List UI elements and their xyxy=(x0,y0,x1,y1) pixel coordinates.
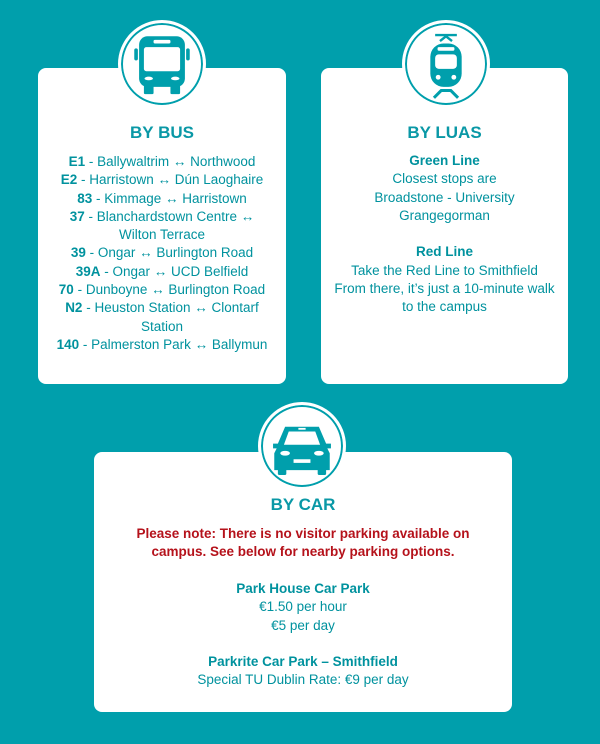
parking note xyxy=(136,526,470,559)
bus routes list: E2 - Harristown ↔ Dún Laoghaire xyxy=(61,172,263,187)
bus routes list: 70 - Dunboyne ↔ Burlington Road xyxy=(59,282,265,297)
luas text: Red Line xyxy=(416,244,473,259)
heading: by car: BY CAR xyxy=(271,495,335,514)
luas text: Grangegorman xyxy=(399,208,490,223)
panel: car xyxy=(94,452,512,712)
luas text: Broadstone - University xyxy=(374,190,515,205)
luas text xyxy=(334,153,555,314)
panel: bus xyxy=(38,68,286,384)
parking note: campus. See below for nearby parking options. xyxy=(151,544,455,559)
icon: luas tram xyxy=(402,20,490,108)
parking note: Please note: There is no visitor parking available on xyxy=(136,526,470,541)
heading: by luas: BY LUAS xyxy=(407,123,482,142)
icon: car xyxy=(258,402,346,490)
bus routes list: 37 - Blanchardstown Centre ↔ xyxy=(70,209,254,224)
bus routes list xyxy=(57,154,267,352)
luas text: Closest stops are xyxy=(392,171,497,186)
luas text: Green Line xyxy=(409,153,480,168)
parking options: Parkrite Car Park – Smithfield xyxy=(208,654,398,669)
parking options xyxy=(197,581,409,687)
icon: bus xyxy=(118,20,206,108)
parking options: €5 per day xyxy=(271,618,335,633)
bus routes list: N2 - Heuston Station ↔ Clontarf xyxy=(65,300,259,315)
heading: by bus: BY BUS xyxy=(130,123,194,142)
panel: luas xyxy=(321,68,568,384)
luas text: From there, it’s just a 10-minute walk xyxy=(334,281,555,296)
bus routes list: E1 - Ballywaltrim ↔ Northwood xyxy=(69,154,255,169)
bus routes list: 39 - Ongar ↔ Burlington Road xyxy=(71,245,253,260)
parking options: Park House Car Park xyxy=(236,581,370,596)
bus routes list: Wilton Terrace xyxy=(119,227,205,242)
bus routes list: 39A - Ongar ↔ UCD Belfield xyxy=(76,264,248,279)
luas text: to the campus xyxy=(402,299,487,314)
bus routes list: 83 - Kimmage ↔ Harristown xyxy=(77,191,247,206)
luas text: Take the Red Line to Smithfield xyxy=(351,263,538,278)
bus routes list: Station xyxy=(141,319,183,334)
parking options: €1.50 per hour xyxy=(259,599,347,614)
bus routes list: 140 - Palmerston Park ↔ Ballymun xyxy=(57,337,267,352)
parking options: Special TU Dublin Rate: €9 per day xyxy=(197,672,409,687)
